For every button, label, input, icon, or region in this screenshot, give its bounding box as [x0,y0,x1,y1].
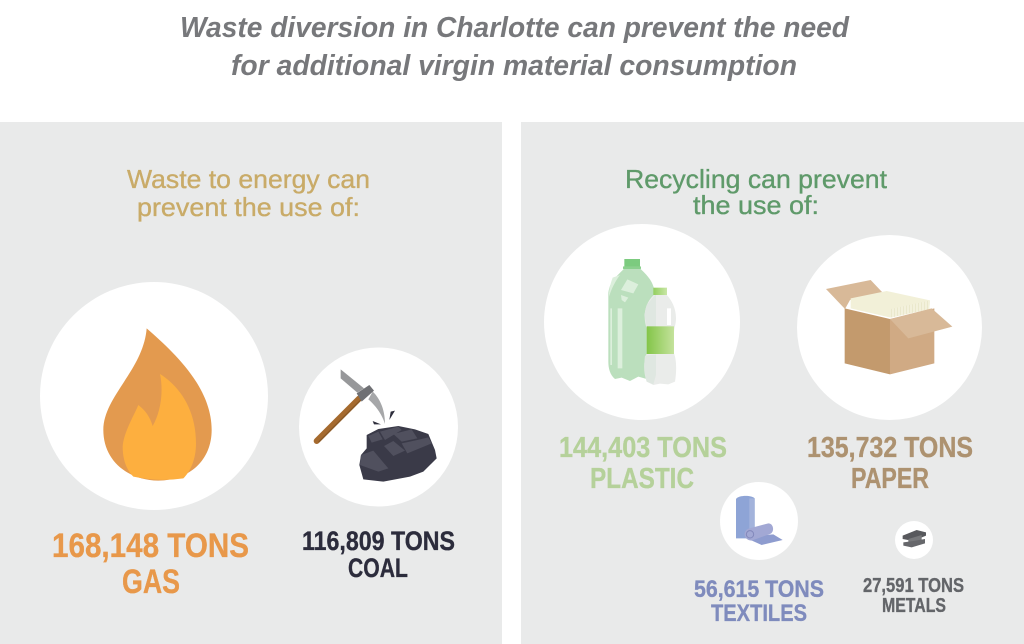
icon: pickaxe and coal [299,348,458,506]
heading: recycling [625,164,888,220]
paper figure: 135,732 TONS [807,432,973,464]
icon: cardboard box with paper [797,235,982,420]
plastic figure [559,432,727,495]
panel: recycling [521,122,1024,644]
coal figure: COAL [348,553,408,583]
heading: waste to energy: Waste to energy can [127,164,370,194]
icon: textile rolls [720,482,798,560]
metals figure [863,575,964,617]
metals figure: METALS [882,595,946,617]
textiles figure: 56,615 TONS [694,576,824,603]
textiles figure [694,576,824,627]
gas figure: GAS [122,563,180,601]
gas figure: 168,148 TONS [52,527,249,565]
title: Waste diversion in Charlotte can prevent the need [180,12,850,44]
plastic figure: PLASTIC [590,463,694,495]
plastic figure: 144,403 TONS [559,432,727,464]
coal figure [302,526,455,583]
heading: waste to energy [127,164,370,222]
icon: flame [40,282,268,510]
icon: plastic bottles [544,224,740,420]
coal figure: 116,809 TONS [302,526,455,556]
gas figure [52,527,249,601]
title [180,12,850,82]
metals figure: 27,591 TONS [863,575,964,597]
heading: waste to energy: prevent the use of: [137,192,360,222]
paper figure [807,432,973,495]
icon: metal beam [895,521,933,559]
heading: recycling: the use of: [693,190,819,220]
textiles figure: TEXTILES [711,600,807,627]
panel: waste to energy [0,122,502,644]
heading: recycling: Recycling can prevent [625,164,888,194]
title: for additional virgin material consumption [231,50,797,82]
paper figure: PAPER [851,463,929,495]
